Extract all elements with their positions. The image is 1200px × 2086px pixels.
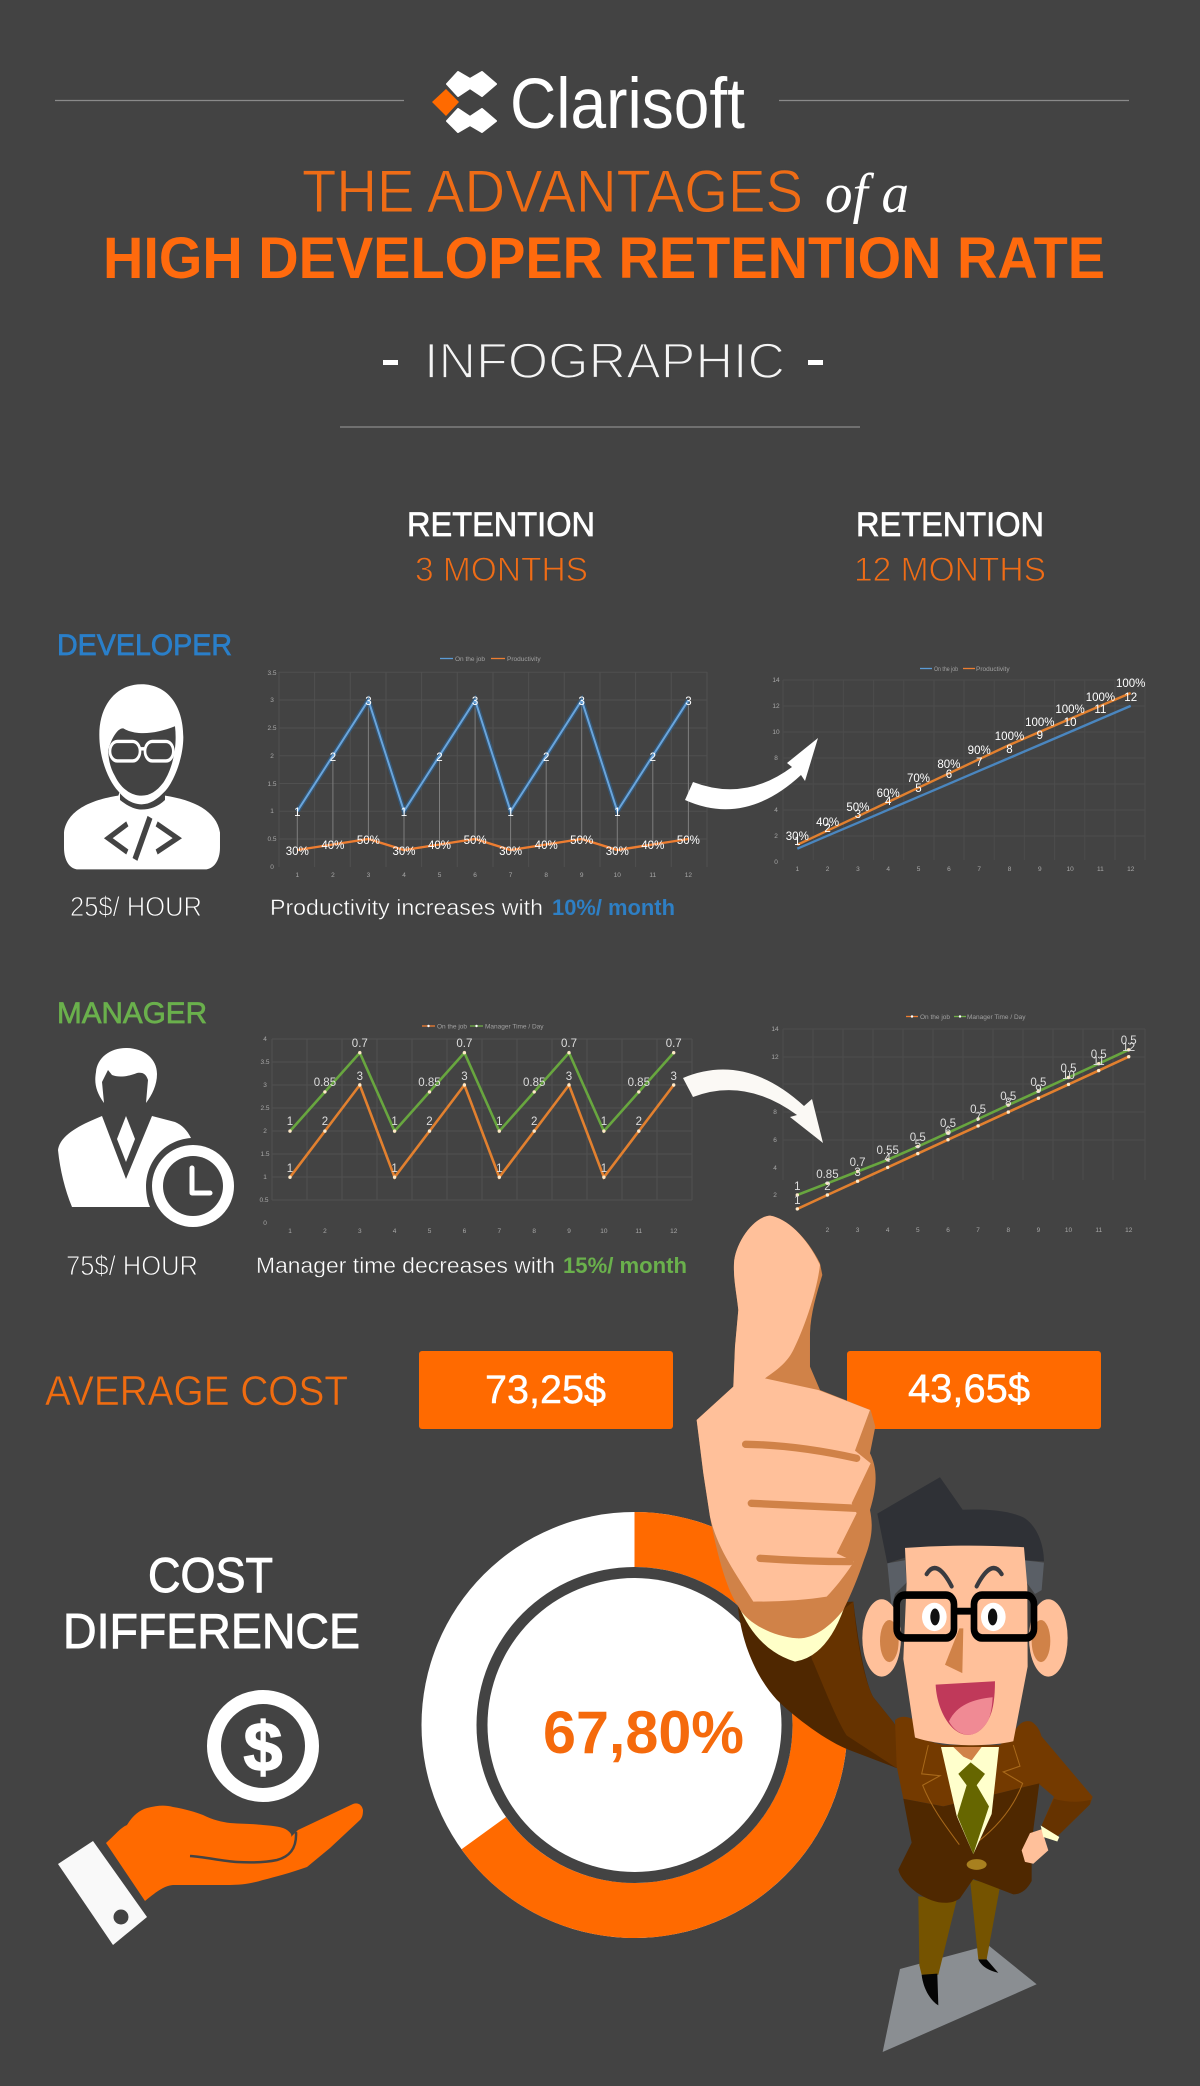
line chart: developer retention 3 months: 1 <box>401 807 407 819</box>
line chart: manager retention 3 months: 3 <box>566 1071 572 1083</box>
line chart: developer retention 3 months: 2.5 <box>267 725 277 732</box>
line chart: developer retention 3 months: 50% <box>357 835 380 847</box>
line chart: developer retention 12 months: 2 <box>826 866 830 873</box>
line chart: developer retention 12 months: 1 <box>794 836 801 848</box>
line chart: developer retention 12 months: 10 <box>1066 866 1074 873</box>
line chart: developer retention 3 months: 5 <box>438 872 442 879</box>
line chart: developer retention 3 months: 2 <box>436 752 443 764</box>
line chart: developer retention 12 months: 9 <box>1037 730 1043 742</box>
line chart: developer retention 3 months: 40% <box>641 840 664 852</box>
line chart: manager retention 3 months: 2 <box>323 1228 327 1235</box>
manager caption <box>256 1253 687 1278</box>
line chart: manager retention 12 months: 6 <box>773 1137 777 1144</box>
line chart: developer retention 12 months: 8 <box>1008 866 1012 873</box>
line chart: developer retention 3 months: 10 <box>614 872 621 879</box>
line chart: developer retention 12 months: 14 <box>772 677 780 684</box>
line chart: developer retention 12 months: 2 <box>824 823 831 835</box>
line chart: developer retention 12 months: 80% <box>937 759 960 771</box>
legend: Productivity <box>976 666 1010 673</box>
icon: open hand <box>58 1803 363 1945</box>
line chart: manager retention 3 months: 0 <box>263 1220 267 1227</box>
line chart: manager retention 3 months: 2.5 <box>260 1105 270 1112</box>
cost difference heading: COST <box>148 1549 273 1603</box>
line chart: developer retention 3 months: 30% <box>392 846 416 858</box>
line chart: developer retention 12 months: 90% <box>968 745 991 757</box>
line chart: developer retention 12 months: 8 <box>1006 744 1013 756</box>
line chart: manager retention 12 months: 9 <box>1037 1227 1041 1234</box>
thumbs-up hand <box>697 1216 876 1662</box>
developer caption <box>270 895 675 920</box>
line chart: manager retention 12 months: 0.5 <box>1060 1063 1076 1075</box>
line chart: manager retention 12 months: 2 <box>773 1192 777 1199</box>
line chart: developer retention 12 months: 4 <box>886 866 890 873</box>
developer caption: 10%/ month <box>552 895 675 920</box>
line chart: manager retention 3 months: 5 <box>428 1228 432 1235</box>
title: THE ADVANTAGES <box>302 158 803 225</box>
line chart: developer retention 12 months: 1 <box>795 866 799 873</box>
line chart: developer retention 3 months: 3 <box>270 697 274 704</box>
logo wordmark: Clarisoft <box>510 65 745 144</box>
line chart: manager retention 12 months: 11 <box>1095 1227 1102 1234</box>
line chart: developer retention 3 months: 1.5 <box>267 781 277 788</box>
column heading: retention 3 months <box>407 506 595 589</box>
line chart: developer retention 12 months: 12 <box>1127 866 1135 873</box>
line chart: developer retention 12 months: 12 <box>772 703 780 710</box>
line chart: manager retention 12 months: 7 <box>976 1227 980 1234</box>
line chart: manager retention 3 months: 1 <box>391 1116 398 1128</box>
line chart: developer retention 12 months: 7 <box>976 757 982 769</box>
line chart: manager retention 12 months: 1 <box>794 1181 801 1193</box>
line chart: developer retention 3 months: 3 <box>472 696 478 708</box>
line chart: developer retention 12 months: 100% <box>1055 704 1085 716</box>
column heading: retention 12 months <box>854 506 1046 589</box>
line chart: developer retention 3 months: 12 <box>685 872 692 879</box>
line chart: manager retention 3 months: 2 <box>263 1128 267 1135</box>
line chart: developer retention 12 months: 9 <box>1038 866 1042 873</box>
line chart: developer retention 3 months: 1 <box>294 807 301 819</box>
line chart: developer retention 3 months: 3 <box>578 696 585 708</box>
logo icon <box>432 72 496 132</box>
line chart: manager retention 3 months: 2 <box>531 1116 537 1128</box>
line chart: manager retention 3 months: 4 <box>393 1228 397 1235</box>
line chart: developer retention 3 months: 2 <box>543 752 549 764</box>
title: HIGH DEVELOPER RETENTION RATE <box>103 226 1105 291</box>
line chart: developer retention 3 months: 1 <box>614 807 621 819</box>
line chart: developer retention 12 months: 7 <box>977 866 981 873</box>
title: of a <box>825 163 909 225</box>
line chart: manager retention 3 months: 9 <box>567 1228 571 1235</box>
line chart: manager retention 12 months: 5 <box>916 1227 920 1234</box>
cost difference heading: DIFFERENCE <box>63 1605 360 1659</box>
line chart: developer retention 3 months: 50% <box>464 835 487 847</box>
line chart: manager retention 3 months: 0.7 <box>352 1038 368 1050</box>
line chart: manager retention 3 months: 1 <box>601 1163 607 1175</box>
legend <box>422 1024 544 1030</box>
line chart: manager retention 12 months: 10 <box>1065 1227 1072 1234</box>
line chart: developer retention 12 months: 0 <box>774 859 778 866</box>
line chart: developer retention 12 months: 6 <box>947 866 951 873</box>
line chart: manager retention 12 months: 2 <box>824 1181 831 1193</box>
line chart: manager retention 3 months: 0.7 <box>561 1038 577 1050</box>
line chart: developer retention 3 months: 8 <box>544 872 548 879</box>
cost box: 12 months <box>847 1351 1101 1429</box>
line chart: developer retention 12 months: 100% <box>1025 717 1055 729</box>
line chart: developer retention 3 months: 9 <box>580 872 584 879</box>
line chart: developer retention 12 months: 8 <box>774 755 778 762</box>
line chart: developer retention 3 months: 7 <box>509 872 513 879</box>
line chart: manager retention 3 months: 12 <box>670 1228 678 1235</box>
cost box: 3 months: 73,25$ <box>485 1368 606 1412</box>
line chart: manager retention 3 months: 1 <box>391 1163 398 1175</box>
legend: On the job <box>934 666 958 673</box>
line chart: manager retention 12 months: 3 <box>856 1227 860 1234</box>
line chart: manager retention 3 months: 2 <box>322 1116 328 1128</box>
line chart: manager retention 3 months: 3 <box>263 1082 267 1089</box>
line chart: developer retention 12 months: 4 <box>774 807 778 814</box>
line chart: manager retention 3 months: 1 <box>263 1174 267 1181</box>
line chart: manager retention 3 months: 6 <box>463 1228 467 1235</box>
line chart: developer retention 12 months: 4 <box>885 796 892 808</box>
line chart: developer retention 12 months: 3 <box>856 866 860 873</box>
line chart: developer retention 12 months: 30% <box>786 831 809 843</box>
legend: Productivity <box>507 656 541 663</box>
line chart: developer retention 3 months: 6 <box>473 872 477 879</box>
line chart: developer retention 3 months: 50% <box>570 835 593 847</box>
line chart: developer retention 12 months: 100% <box>1116 678 1145 690</box>
line chart: manager retention 3 months: 0.85 <box>418 1077 441 1089</box>
icon: developer <box>64 684 220 869</box>
line chart: developer retention 12 months: 11 <box>1094 704 1106 716</box>
line chart: manager retention 12 months: 0.5 <box>1000 1091 1016 1103</box>
line chart: manager retention 12 months: 8 <box>1005 1097 1012 1109</box>
legend: On the job <box>437 1024 467 1030</box>
line chart: manager retention 12 months: 4 <box>773 1165 777 1172</box>
line chart: developer retention 12 months: 3 <box>855 809 861 821</box>
line chart: manager retention 12 months: 12 <box>1125 1227 1133 1234</box>
floor shadow <box>883 1945 1037 2052</box>
line chart: manager retention 3 months: 1 <box>287 1163 293 1175</box>
line chart: developer retention 3 months: 1 <box>507 807 514 819</box>
line chart: developer retention 3 months: 2 <box>330 752 336 764</box>
manager rate: 75$/ HOUR <box>66 1250 198 1281</box>
line chart: manager retention 3 months: 2 <box>426 1116 433 1128</box>
legend <box>906 1014 1026 1021</box>
line chart: manager retention 12 months: 6 <box>945 1126 951 1138</box>
manager heading: MANAGER <box>57 997 207 1030</box>
line chart: developer retention 12 months <box>772 666 1145 873</box>
line chart: manager retention 12 months: 2 <box>826 1227 830 1234</box>
line chart: manager retention 12 months: 10 <box>1062 1070 1075 1082</box>
line chart: manager retention 3 months: 8 <box>532 1228 536 1235</box>
line chart: manager retention 12 months: 0.85 <box>816 1169 839 1181</box>
subtitle: infographic: INFOGRAPHIC <box>424 333 785 389</box>
line chart: manager retention 3 months: 1 <box>496 1116 503 1128</box>
line chart: manager retention 12 months: 0.5 <box>1030 1077 1046 1089</box>
line chart: developer retention 3 months: 3 <box>367 872 371 879</box>
donut chart: cost difference <box>422 1512 848 1938</box>
arrow: to 12 month developer chart <box>685 738 818 809</box>
line chart: manager retention 12 months: 11 <box>1093 1056 1105 1068</box>
line chart: manager retention 3 months: 1 <box>496 1163 503 1175</box>
line chart: manager retention 3 months: 3 <box>461 1071 468 1083</box>
icon: dollar coin: $ <box>244 1708 282 1786</box>
line chart: manager retention 3 months: 0.85 <box>314 1077 336 1089</box>
line chart: developer retention 3 months: 1 <box>270 808 274 815</box>
developer heading: DEVELOPER <box>57 629 232 662</box>
line chart: developer retention 12 months: 12 <box>1124 692 1137 704</box>
line chart: manager retention 3 months: 0.7 <box>456 1038 472 1050</box>
developer caption: Productivity increases with <box>270 895 543 920</box>
line chart: manager retention 12 months: 1 <box>794 1195 801 1207</box>
line chart: developer retention 3 months <box>267 656 707 879</box>
title <box>103 158 1105 291</box>
line chart: manager retention 12 months <box>771 1014 1145 1234</box>
line chart: developer retention 3 months: 30% <box>286 846 309 858</box>
line chart: manager retention 12 months: 0.5 <box>1121 1035 1137 1047</box>
line chart: manager retention 12 months: 14 <box>771 1026 779 1033</box>
legend <box>440 656 541 663</box>
line chart: developer retention 3 months: 2 <box>650 752 656 764</box>
line chart: manager retention 3 months: 3 <box>670 1071 677 1083</box>
legend: On the job <box>455 656 485 663</box>
developer rate: 25$/ HOUR <box>70 891 202 922</box>
businessman body <box>738 1602 1093 2005</box>
line chart: developer retention 12 months: 50% <box>846 802 869 814</box>
line chart: developer retention 3 months: 30% <box>606 846 629 858</box>
line chart: developer retention 3 months: 40% <box>535 840 558 852</box>
line chart: manager retention 12 months: 6 <box>946 1227 950 1234</box>
icon: dollar coin <box>214 1697 312 1795</box>
line chart: manager retention 3 months: 11 <box>635 1228 643 1235</box>
legend <box>920 666 1010 673</box>
line chart: developer retention 3 months: 1 <box>295 872 299 879</box>
line chart: developer retention 3 months: 11 <box>649 872 657 879</box>
cost difference heading <box>63 1549 360 1659</box>
line chart: manager retention 3 months: 4 <box>263 1036 267 1043</box>
donut value: 67,80% <box>543 1699 744 1766</box>
line chart: manager retention 12 months: 12 <box>1122 1042 1135 1054</box>
line chart: manager retention 3 months: 1 <box>287 1116 293 1128</box>
line chart: developer retention 3 months: 2 <box>270 753 274 760</box>
line chart: developer retention 12 months: 2 <box>774 833 778 840</box>
line chart: manager retention 12 months: 0.5 <box>970 1104 986 1116</box>
line chart: manager retention 3 months: 1 <box>601 1116 607 1128</box>
line chart: manager retention 12 months: 0.5 <box>940 1118 956 1130</box>
line chart: manager retention 12 months: 9 <box>1035 1084 1042 1096</box>
column heading: retention 12 months: RETENTION <box>856 506 1044 544</box>
line chart: developer retention 3 months: 3 <box>685 696 692 708</box>
cost box: 12 months: 43,65$ <box>908 1367 1030 1411</box>
line chart: manager retention 12 months: 12 <box>771 1054 779 1061</box>
line chart: manager retention 12 months: 0.7 <box>850 1157 866 1169</box>
line chart: manager retention 12 months: 8 <box>773 1109 777 1116</box>
line chart: manager retention 3 months: 7 <box>497 1228 501 1235</box>
line chart: manager retention 12 months: 8 <box>1006 1227 1010 1234</box>
line chart: developer retention 3 months: 3.5 <box>267 670 277 677</box>
line chart: manager retention 3 months: 3.5 <box>260 1059 270 1066</box>
line chart: developer retention 12 months: 5 <box>917 866 921 873</box>
character: thumbs-up businessman <box>697 1216 1093 2052</box>
line chart: manager retention 3 months: 1.5 <box>260 1151 270 1158</box>
businessman head <box>862 1477 1068 1745</box>
legend: Manager Time / Day <box>967 1014 1026 1021</box>
line chart: manager retention 3 months: 0.5 <box>259 1197 269 1204</box>
line chart: developer retention 12 months: 10 <box>1064 717 1076 729</box>
line chart: developer retention 12 months: 40% <box>816 817 839 829</box>
line chart: developer retention 12 months: 6 <box>946 769 952 781</box>
line chart: manager retention 12 months: 0.5 <box>910 1132 926 1144</box>
line chart: developer retention 3 months: 4 <box>402 872 406 879</box>
arrow: to 12 month manager chart <box>683 1070 823 1143</box>
line chart: developer retention 3 months: 3 <box>365 696 372 708</box>
line chart: developer retention 3 months: 50% <box>677 835 700 847</box>
cost box: 3 months <box>419 1351 673 1429</box>
line chart: manager retention 12 months: 4 <box>884 1153 891 1165</box>
column heading: retention 3 months: 3 MONTHS <box>415 551 588 589</box>
line chart: developer retention 3 months: 2 <box>331 872 335 879</box>
line chart: developer retention 3 months: 0.5 <box>267 836 277 843</box>
line chart: developer retention 12 months: 100% <box>995 731 1024 743</box>
line chart: developer retention 12 months: 5 <box>915 783 922 795</box>
line chart: manager retention 12 months: 0.55 <box>877 1145 899 1157</box>
line chart: manager retention 12 months: 7 <box>975 1112 981 1124</box>
line chart: developer retention 12 months: 11 <box>1097 866 1104 873</box>
line chart: manager retention 3 months: 2 <box>636 1116 642 1128</box>
line chart: developer retention 3 months: 30% <box>499 846 522 858</box>
line chart: manager retention 3 months: 10 <box>600 1228 608 1235</box>
line chart: manager retention 12 months: 0.5 <box>1091 1049 1107 1061</box>
line chart: manager retention 3 months: 3 <box>357 1071 363 1083</box>
line chart: manager retention 12 months: 4 <box>886 1227 890 1234</box>
column heading: retention 3 months: RETENTION <box>407 506 595 544</box>
line chart: manager retention 3 months: 0.7 <box>666 1038 682 1050</box>
line chart: manager retention 3 months: 0.85 <box>628 1077 650 1089</box>
line chart: manager retention 12 months: 3 <box>854 1167 861 1179</box>
legend: Manager Time / Day <box>485 1024 544 1030</box>
line chart: manager retention 3 months <box>259 1024 692 1235</box>
line chart: manager retention 12 months: 5 <box>915 1139 921 1151</box>
line chart: developer retention 12 months: 100% <box>1086 692 1115 704</box>
legend: On the job <box>920 1014 950 1021</box>
average cost label: AVERAGE COST <box>45 1367 348 1414</box>
line chart: manager retention 3 months: 3 <box>358 1228 362 1235</box>
logo: Clarisoft <box>432 65 745 144</box>
line chart: developer retention 3 months: 40% <box>428 840 451 852</box>
line chart: developer retention 3 months: 0 <box>270 864 274 871</box>
manager caption: Manager time decreases with <box>256 1253 555 1278</box>
line chart: developer retention 12 months: 70% <box>907 773 930 785</box>
icon: manager <box>58 1048 234 1227</box>
line chart: manager retention 3 months: 1 <box>288 1228 292 1235</box>
line chart: developer retention 12 months: 10 <box>772 729 780 736</box>
line chart: developer retention 12 months: 60% <box>877 788 900 800</box>
manager caption: 15%/ month <box>563 1253 687 1278</box>
line chart: manager retention 3 months: 0.85 <box>523 1077 545 1089</box>
line chart: developer retention 3 months: 40% <box>321 840 344 852</box>
column heading: retention 12 months: 12 MONTHS <box>854 551 1046 589</box>
